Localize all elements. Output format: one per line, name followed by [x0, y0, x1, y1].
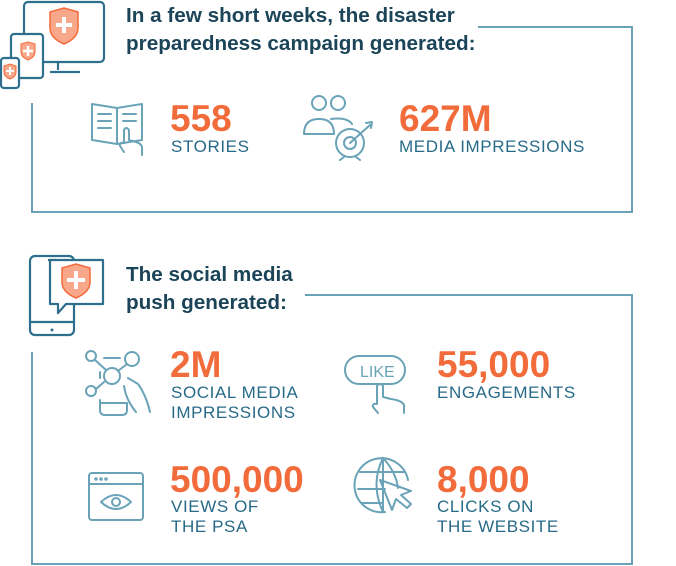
stat: 2M social media impressions: [170, 344, 299, 422]
stat: 558 stories: STORIES: [171, 137, 250, 156]
stat: 500,000 views: VIEWS OF: [171, 497, 259, 516]
stat: 8,000 clicks: THE WEBSITE: [437, 517, 559, 536]
title: social heading: [126, 263, 293, 314]
icon: network with phone: [86, 351, 150, 415]
title: social heading: push generated:: [126, 291, 287, 314]
stat: 627M media impressions: 627M: [399, 98, 492, 139]
stat: 55,000 engagements: [437, 344, 576, 402]
stat: 55,000 engagements: ENGAGEMENTS: [437, 383, 576, 402]
icon: phone with chat shield: [30, 256, 103, 335]
stat: 2M social media impressions: IMPRESSIONS: [171, 403, 296, 422]
icon: like button: LIKE: [360, 364, 395, 381]
stat: 8,000 clicks: 8,000: [437, 459, 530, 500]
stat: 500,000 views: 500,000: [170, 459, 304, 500]
icon: book with hand: [92, 104, 142, 155]
icon: browser with eye: [89, 473, 143, 520]
stat: 8,000 clicks: [437, 459, 559, 536]
icon: like button: [345, 356, 405, 413]
title: campaign heading: [126, 4, 476, 55]
title: campaign heading: preparedness campaign generated:: [126, 32, 476, 55]
stat: 2M social media impressions: 2M: [170, 344, 221, 385]
stat: 55,000 engagements: 55,000: [437, 344, 550, 385]
panel: campaign frame: [32, 27, 632, 212]
stat: 627M media impressions: [399, 98, 585, 156]
icon: people with target: [304, 96, 372, 160]
icon: devices with shields: [1, 2, 104, 88]
stat: 627M media impressions: MEDIA IMPRESSIONS: [399, 137, 585, 156]
stat: 500,000 views: THE PSA: [171, 517, 248, 536]
stat: 558 stories: [170, 98, 250, 156]
icon: globe with cursor: [355, 458, 411, 512]
stat: 8,000 clicks: CLICKS ON: [437, 497, 534, 516]
title: social heading: The social media: [126, 263, 293, 286]
title: campaign heading: In a few short weeks, the disaster: [126, 4, 455, 27]
stat: 500,000 views: [170, 459, 304, 536]
stat: 2M social media impressions: SOCIAL MEDIA: [171, 383, 299, 402]
stat: 558 stories: 558: [170, 98, 232, 139]
panel: social frame: [32, 295, 632, 564]
